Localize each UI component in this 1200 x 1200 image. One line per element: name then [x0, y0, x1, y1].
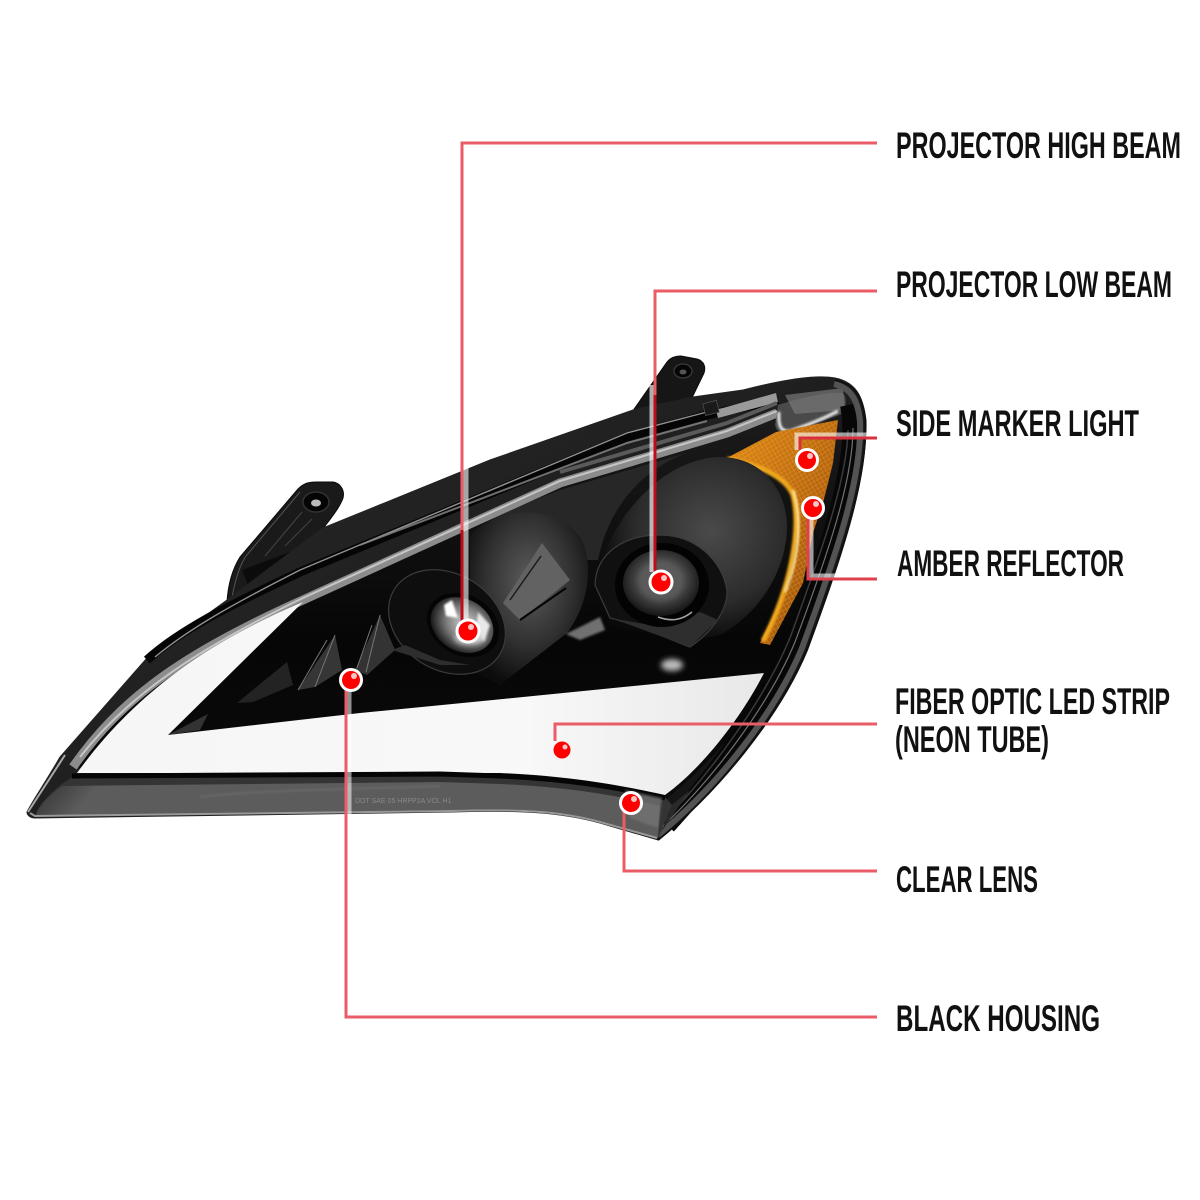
reflection patch: [566, 617, 605, 640]
mounting bracket left: [227, 482, 343, 602]
upper shoulder shading: [470, 452, 690, 560]
corner tip: [658, 790, 690, 840]
low beam projector lens: [595, 535, 727, 647]
high beam projector body: [470, 512, 588, 685]
callout: amber reflector: [802, 498, 1124, 584]
clear lens lower band: DOT SAE 05 HRPP2A VOL H1: [355, 798, 452, 805]
gloss highlight: [661, 659, 683, 671]
callout: side marker light: [796, 403, 1139, 470]
amber reflector: [725, 420, 838, 645]
neon tube LED strip: [77, 602, 764, 795]
inner black housing: [73, 400, 844, 800]
callout: black housing: [340, 670, 1100, 1039]
clear lens lower band: [28, 755, 672, 838]
high beam projector lens: [369, 548, 525, 696]
callout: fiber optic LED strip: (NEON TUBE): [895, 719, 1049, 760]
lower reflector fins: [168, 615, 395, 735]
housing silhouette: [27, 377, 866, 840]
callout: projector high beam: [457, 125, 1181, 642]
callout: black housing: BLACK HOUSING: [896, 998, 1100, 1039]
callout: clear lens: CLEAR LENS: [896, 859, 1038, 900]
mounting bracket right: [630, 356, 705, 415]
chrome strip: [73, 403, 777, 767]
callout: clear lens: [620, 792, 1038, 900]
headlight illustration: [27, 356, 866, 840]
callout: fiber optic LED strip: [554, 681, 1170, 760]
low beam projector body: [596, 457, 787, 642]
clear corner lens tube: [775, 388, 846, 433]
right bezel: [658, 380, 865, 840]
upper trim band: [147, 393, 778, 660]
callout: projector low beam: [650, 264, 1172, 593]
